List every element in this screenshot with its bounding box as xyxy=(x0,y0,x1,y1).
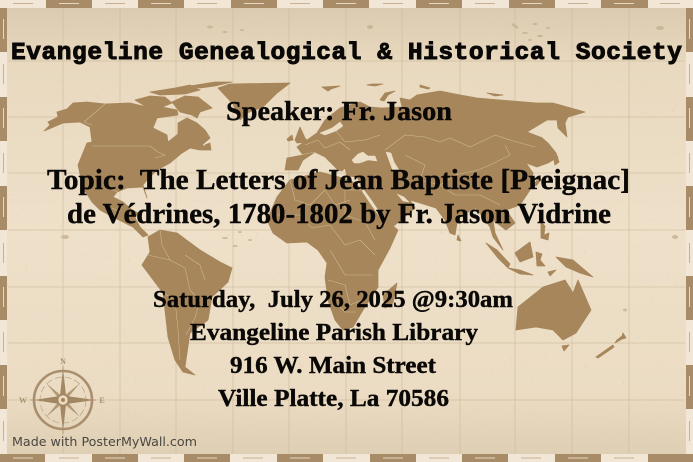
event details: 916 W. Main Street xyxy=(230,352,437,379)
British Isles and Iceland xyxy=(287,86,340,143)
compass letters: W xyxy=(19,396,27,405)
compass rose xyxy=(19,357,105,434)
map land mottling xyxy=(328,126,404,205)
Madagascar xyxy=(383,283,397,308)
event details: Ville Platte, La 70586 xyxy=(218,385,449,412)
title: Evangeline Genealogical & Historical Society xyxy=(11,40,682,67)
event details: Saturday, July 26, 2025 @9:30am xyxy=(153,286,513,313)
country borders xyxy=(84,104,535,360)
speckle clusters xyxy=(61,22,678,312)
South America xyxy=(142,230,232,375)
Australia xyxy=(516,280,591,340)
world map xyxy=(40,80,626,380)
event details: Evangeline Parish Library xyxy=(190,319,479,346)
event details xyxy=(153,286,513,412)
Japan and Sakhalin xyxy=(534,137,559,186)
Africa xyxy=(267,172,398,330)
Greenland xyxy=(218,83,290,120)
topic xyxy=(47,165,630,230)
compass letters: E xyxy=(99,396,105,405)
compass letters xyxy=(19,357,105,405)
New Zealand and Tasmania xyxy=(562,333,626,358)
topic: Topic: The Letters of Jean Baptiste [Preignac] xyxy=(47,165,630,196)
inland seas xyxy=(320,122,409,220)
Southeast Asian islands xyxy=(457,222,556,276)
Eurasia xyxy=(285,91,585,250)
watermark: Made with PosterMyWall.com xyxy=(12,434,197,449)
Arctic islands xyxy=(135,82,232,150)
North America xyxy=(44,102,210,237)
topic: de Védrines, 1780-1802 by Fr. Jason Vidrine xyxy=(67,199,611,230)
Arctic Eurasian islands xyxy=(367,84,503,101)
New Guinea xyxy=(556,257,593,277)
speaker: Speaker: Fr. Jason xyxy=(226,96,452,126)
compass letters: N xyxy=(60,357,66,366)
